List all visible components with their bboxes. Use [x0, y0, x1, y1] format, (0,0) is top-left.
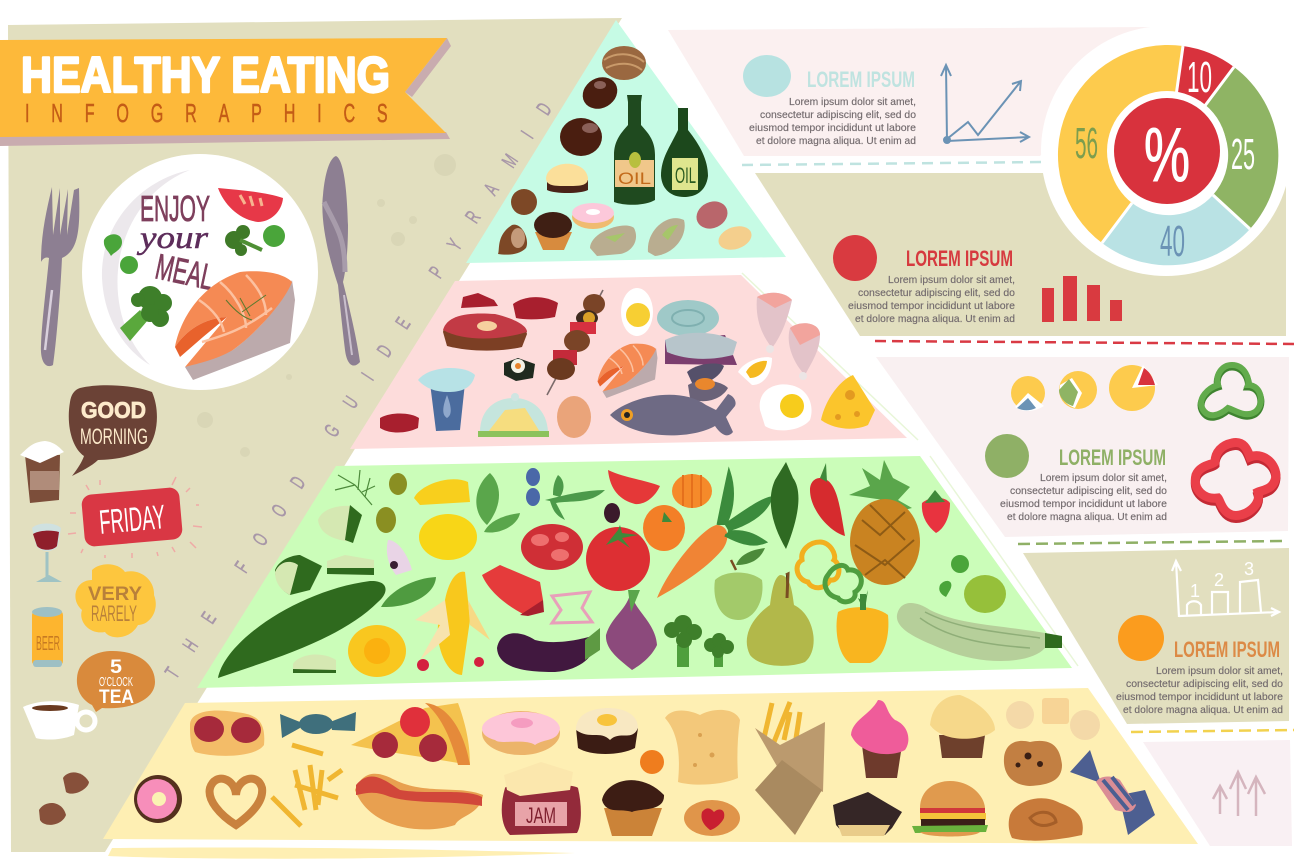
- body text: eiusmod tempor incididunt ut labore: [1000, 498, 1167, 510]
- banana: [415, 572, 490, 675]
- heading: LOREM IPSUM: [906, 246, 1013, 271]
- parsley: [225, 225, 262, 256]
- subtitle: infographics: INFOGRAPHICS: [25, 98, 388, 128]
- yogurt cup: [418, 368, 475, 431]
- carrot: [657, 472, 771, 598]
- white step chart: 2: [1214, 570, 1224, 590]
- orange: [643, 505, 685, 551]
- bubble: five o'clock tea: [77, 651, 155, 712]
- peas: [104, 225, 285, 274]
- chocolate muffin: [602, 780, 664, 836]
- lime: [964, 575, 1006, 613]
- body text: et dolore magna aliqua. Ut enim ad: [1123, 704, 1283, 716]
- line chart: [941, 65, 1029, 143]
- oil bottle two: [661, 108, 708, 197]
- burger: [912, 781, 988, 836]
- eggplant: [497, 628, 600, 672]
- cinnamon roll: [1009, 798, 1083, 841]
- fish: [610, 394, 736, 435]
- apple: [714, 548, 765, 620]
- mushroom: [387, 540, 412, 575]
- pretzel: [210, 779, 262, 825]
- section 2: red info: [833, 235, 1122, 325]
- pear: [747, 574, 814, 666]
- cheese: [821, 375, 875, 429]
- donut chart: 56: [1075, 119, 1098, 168]
- egg: [557, 396, 591, 438]
- tier 1: nuts and oils: [498, 46, 755, 256]
- bubble: very rarely: VERY: [88, 584, 142, 605]
- mini pie charts: [1011, 365, 1158, 411]
- icon: wine glass: [32, 524, 62, 582]
- green segment 25: [1204, 67, 1278, 229]
- body text: consectetur adipiscing elit, sed do: [1126, 678, 1283, 690]
- tin of fish: [657, 300, 737, 365]
- badge: green: [985, 434, 1029, 478]
- badge: light blue: [743, 55, 791, 97]
- peas and leaf: [939, 555, 969, 597]
- tomato wedge: [218, 188, 283, 222]
- section 4: orange info: [1116, 559, 1283, 716]
- bell pepper rings: [797, 542, 861, 602]
- strawberry: [922, 490, 950, 533]
- bubble: friday: FRIDAY: [98, 498, 167, 542]
- chili: [810, 463, 845, 536]
- body text: Lorem ipsum dolor sit amet,: [888, 274, 1015, 286]
- panel: left beige background: [8, 18, 622, 852]
- jam jar: JAM: [526, 803, 556, 828]
- mussel: [687, 364, 728, 401]
- title ribbon: [0, 38, 451, 146]
- donut chart: [1041, 26, 1291, 276]
- pizza toast: [190, 711, 264, 756]
- pink cupcake: [851, 700, 908, 778]
- egg slice: [738, 357, 772, 385]
- oil bottle one: OIL: [618, 169, 651, 188]
- body text: Lorem ipsum dolor sit amet,: [1040, 472, 1167, 484]
- body text: et dolore magna aliqua. Ut enim ad: [756, 135, 916, 147]
- white step chart: 1: [1190, 581, 1200, 601]
- plate text: enjoy your meal: MEAL: [152, 246, 217, 298]
- cream cake: [576, 708, 638, 754]
- salmon steak: [175, 271, 295, 380]
- sugar balls: [1006, 698, 1100, 740]
- chestnuts: [560, 71, 623, 156]
- icon: coffee to go: [20, 441, 64, 503]
- bubble: good morning: MORNING: [80, 424, 148, 449]
- icon: knife: [322, 156, 360, 366]
- berries: [417, 657, 484, 671]
- meat pieces: [461, 293, 558, 319]
- chocolate muffin: [534, 212, 572, 250]
- fried egg: [760, 384, 812, 430]
- olives: [376, 473, 620, 533]
- donut chart: 10: [1187, 53, 1212, 102]
- icon: fork: [41, 187, 79, 366]
- plate text: enjoy your meal: [137, 188, 217, 298]
- bubble: five o'clock tea: O'CLOCK: [99, 674, 133, 689]
- zucchini: [897, 603, 1062, 661]
- donut chart: 40: [1160, 217, 1185, 266]
- cucumber chunks: [275, 505, 374, 595]
- tomato wedge: [608, 470, 660, 504]
- white step chart: [1172, 559, 1279, 617]
- onion ring: [552, 592, 592, 623]
- plate text: enjoy your meal: ENJOY: [140, 188, 210, 229]
- tier 3: fruit and vegetables: [218, 460, 1062, 678]
- donut chart: 25: [1231, 130, 1255, 179]
- title: healthy eating: HEALTHY EATING: [21, 47, 390, 103]
- jam jar: [502, 762, 581, 835]
- halved tomato: [521, 524, 583, 570]
- heading: LOREM IPSUM: [1059, 445, 1166, 470]
- body text: Lorem ipsum dolor sit amet,: [1156, 665, 1283, 677]
- kebab skewer: [547, 290, 605, 395]
- body text: [1116, 665, 1283, 716]
- body text: eiusmod tempor incididunt ut labore: [749, 122, 916, 134]
- icon: teacup: [23, 701, 95, 740]
- section 3: green info: [985, 365, 1276, 523]
- boiled egg half: [621, 288, 653, 336]
- peanuts: [692, 196, 755, 254]
- yellow pepper: [836, 590, 888, 663]
- corn: [348, 625, 406, 677]
- heading: LOREM IPSUM: [807, 67, 915, 92]
- bubble: five o'clock tea: 5: [110, 657, 122, 678]
- lemon slice: [414, 479, 470, 505]
- bubble: friday: [68, 477, 202, 558]
- walnut: [602, 46, 646, 80]
- text: BEER: [36, 633, 60, 655]
- loose fries: [272, 745, 342, 826]
- dill sprig: [335, 470, 375, 505]
- chocolate chip cookie: [1004, 741, 1062, 786]
- mandarin: [672, 474, 712, 508]
- body text: [848, 274, 1015, 325]
- vanilla muffin: [930, 695, 995, 758]
- badge: red: [833, 235, 877, 281]
- plate with salmon and greens: [82, 154, 318, 390]
- tomato slice: [482, 565, 544, 616]
- brownie: [833, 792, 902, 836]
- ribbon candy: [1070, 750, 1155, 835]
- lemon: [419, 514, 477, 560]
- bubble: good morning: GOOD: [81, 397, 146, 423]
- chicken drumsticks: [757, 293, 820, 380]
- plate text: enjoy your meal: your: [137, 219, 209, 255]
- section 1: top info: [743, 55, 1029, 147]
- wrapped candy: [280, 712, 356, 738]
- bubble: very rarely: [75, 564, 156, 637]
- red pepper ring: [1195, 443, 1276, 518]
- body text: [749, 96, 916, 147]
- body text: [1000, 472, 1167, 523]
- pineapple: [849, 460, 920, 585]
- cucumber: [218, 581, 386, 678]
- bubble: good morning: [69, 385, 157, 476]
- steak: [443, 313, 527, 351]
- body text: eiusmod tempor incididunt ut labore: [848, 300, 1015, 312]
- curved side label: the food guide pyramid: THE FOOD GUIDE PYRAMID: [160, 98, 557, 683]
- doughnut: [572, 203, 614, 229]
- body text: consectetur adipiscing elit, sed do: [760, 109, 916, 121]
- sushi: [504, 358, 535, 381]
- body text: consectetur adipiscing elit, sed do: [1010, 485, 1167, 497]
- yellow segment 56: [1058, 45, 1183, 243]
- jam cookie: [684, 800, 740, 836]
- cucumber slice: [293, 654, 336, 673]
- body text: et dolore magna aliqua. Ut enim ad: [855, 313, 1015, 325]
- cream muffin: [546, 164, 588, 193]
- body text: consectetur adipiscing elit, sed do: [858, 287, 1015, 299]
- bubble: very rarely: RARELY: [91, 601, 137, 626]
- hazelnuts: [498, 189, 537, 255]
- pea pod: [381, 577, 436, 607]
- butter dish: [478, 393, 549, 437]
- icon: beer can: [32, 607, 63, 667]
- blue segment 40: [1102, 195, 1250, 265]
- salmon piece: [598, 344, 658, 398]
- icon: coffee beans: [39, 772, 89, 825]
- tomato: [586, 525, 650, 591]
- tier 2: protein and dairy: [380, 288, 875, 438]
- fries cone: [755, 702, 825, 835]
- panel: right background blocks: [668, 27, 1295, 846]
- badge: orange: [1118, 615, 1164, 661]
- broccoli florets: [664, 615, 734, 667]
- hot dog: [355, 774, 483, 829]
- leaves: [476, 473, 520, 533]
- red segment 10: [1176, 46, 1234, 107]
- broccoli: [120, 286, 172, 341]
- body text: eiusmod tempor incididunt ut labore: [1116, 691, 1283, 703]
- white step chart: 3: [1244, 559, 1254, 579]
- oil bottle one: [614, 95, 655, 205]
- body text: Lorem ipsum dolor sit amet,: [789, 96, 916, 108]
- body text: et dolore magna aliqua. Ut enim ad: [1007, 511, 1167, 523]
- red onion: [606, 590, 657, 670]
- donut chart: %: [1144, 113, 1190, 198]
- toast: [665, 710, 740, 785]
- bubble: five o'clock tea: TEA: [99, 687, 134, 708]
- iced doughnut: [482, 711, 560, 755]
- herb: [545, 475, 605, 520]
- blueberries: [526, 468, 540, 506]
- icon: upward arrows: [1213, 772, 1265, 816]
- green pepper ring: [1201, 365, 1261, 417]
- tier 4: treats and grains: [134, 695, 1155, 841]
- jalapeno: [771, 462, 798, 549]
- pistachios: [590, 218, 685, 256]
- small doughnut: [134, 775, 182, 823]
- sausage slice: [380, 414, 419, 432]
- oil bottle two: OIL: [675, 163, 696, 188]
- bar chart: [1042, 276, 1122, 322]
- orange sweet: [640, 750, 664, 774]
- pizza slice: [351, 703, 470, 765]
